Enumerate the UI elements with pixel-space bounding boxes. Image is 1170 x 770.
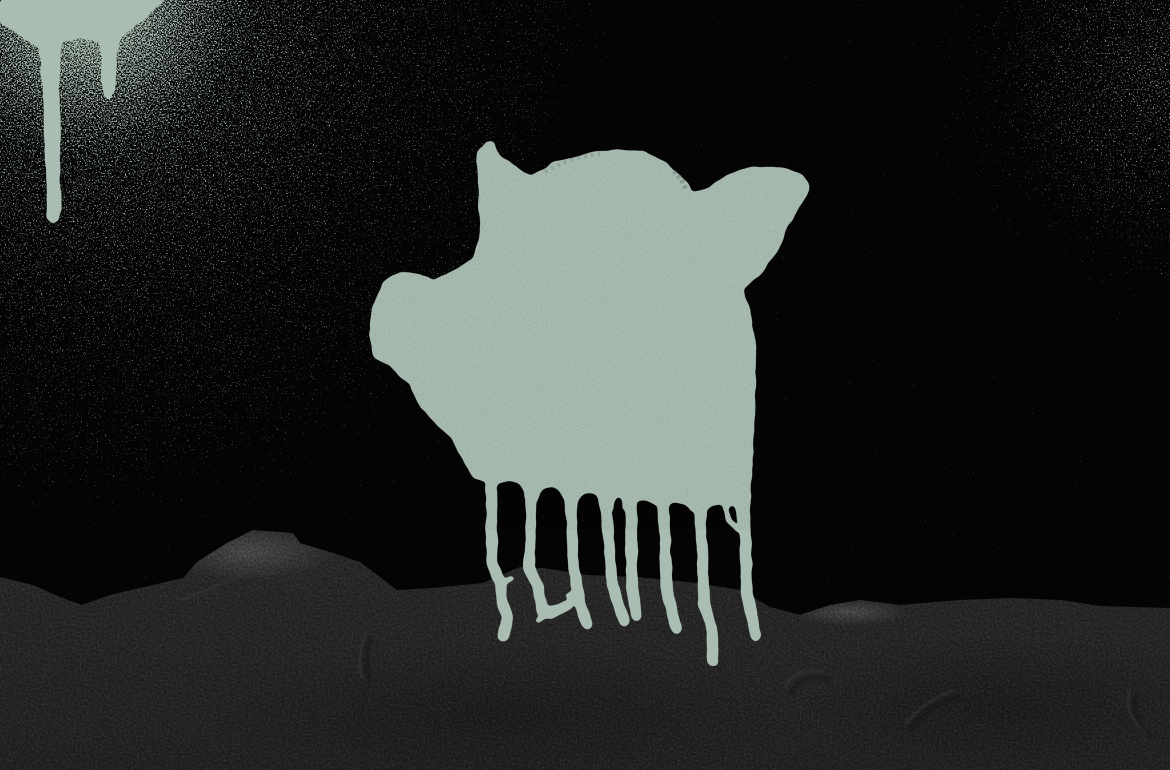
pig grain texture (360, 135, 820, 535)
ground: torn dark paper (0, 520, 1170, 770)
pig drips: eight paint runs (491, 478, 756, 661)
paint spray: top-left blob with drips (0, 0, 178, 224)
pig head silhouette (369, 142, 810, 522)
pig: head and drips (369, 142, 810, 661)
